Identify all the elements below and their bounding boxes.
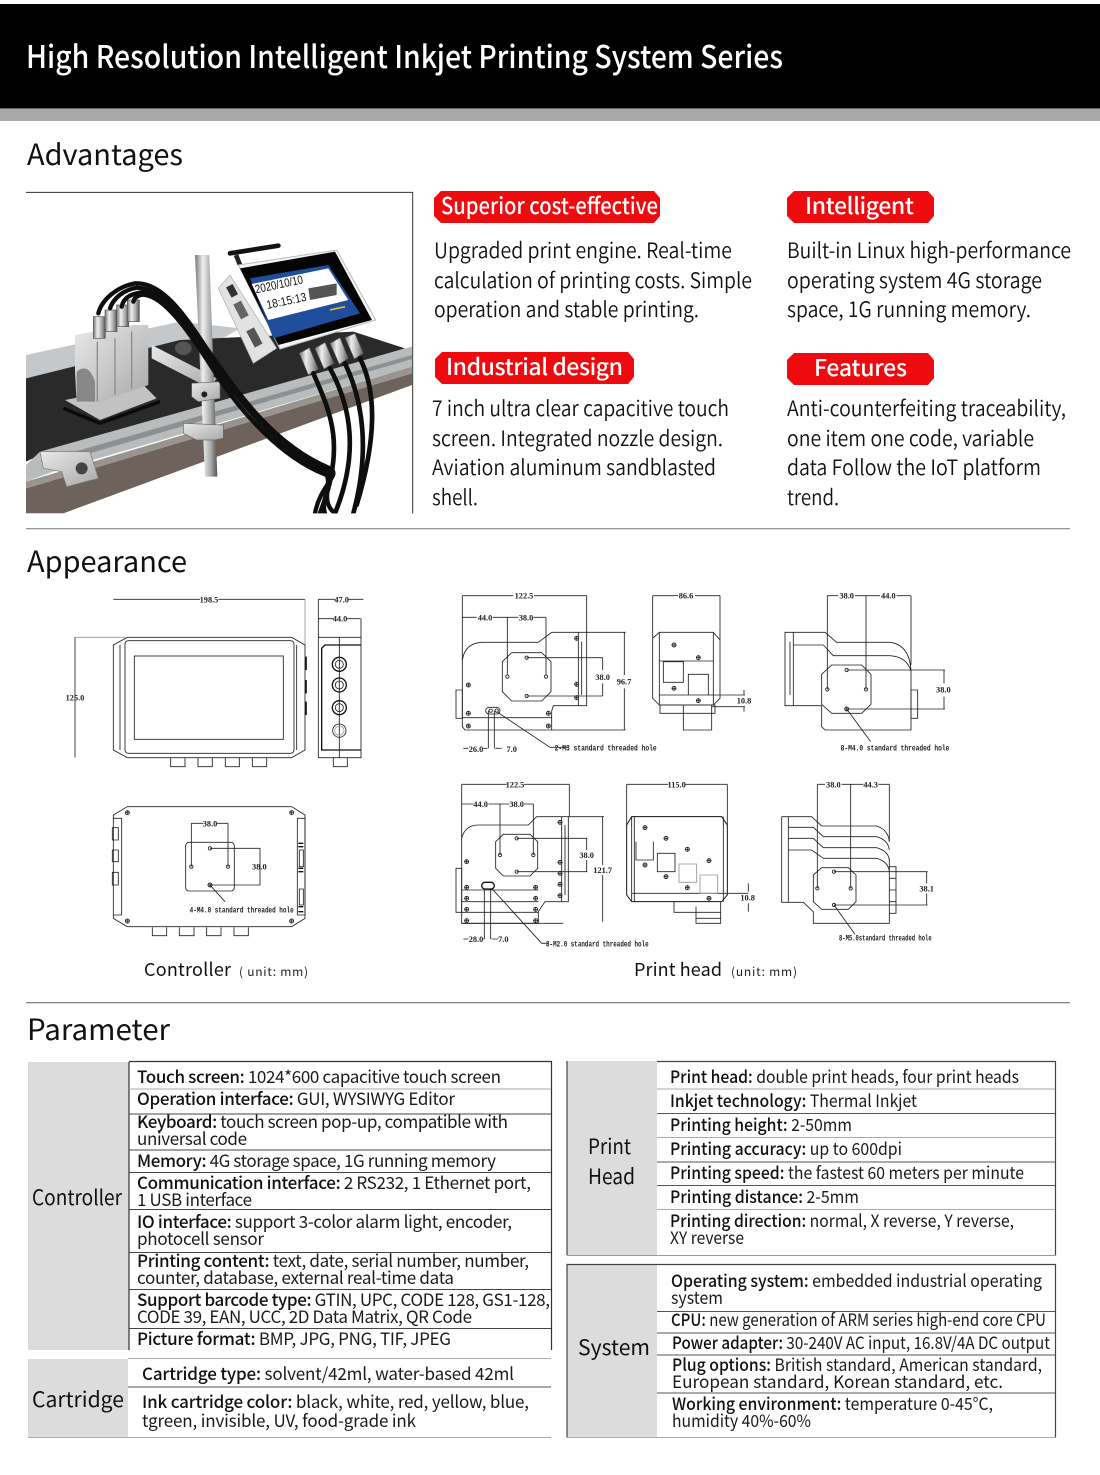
quad head front view: [627, 780, 755, 923]
print head rows: Printing direction: normal, X reverse, Y reverse,: [670, 1207, 1014, 1232]
quad head left view: 38.0: [579, 851, 594, 860]
controller rows: Communication interface: 2 RS232, 1 Ethernet port,: [137, 1169, 531, 1194]
double head left view: [456, 592, 657, 754]
controller front view: 198.5: [200, 595, 218, 604]
title: High Resolution Intelligent Inkjet Printing System Series: [26, 32, 783, 77]
text: intelligent description: operating system 4G storage: [787, 264, 1042, 295]
diagram: double print head drawings: [456, 592, 951, 754]
double head left view: 26.0: [469, 745, 483, 754]
print head rows: Printing height: 2-50mm: [670, 1111, 852, 1136]
text: industrial design description: Aviation aluminum sandblasted: [432, 451, 716, 482]
controller rows: photocell sensor: [137, 1225, 264, 1250]
badge: Industrial design: Industrial design: [446, 348, 623, 382]
controller side view: 44.0: [333, 615, 347, 624]
label: Cartridge: Cartridge: [32, 1384, 124, 1414]
print head rows: Printing speed: the fastest 60 meters per minute: [670, 1159, 1024, 1184]
head base: [65, 385, 157, 420]
text: intelligent description: Built-in Linux high-performance: [787, 234, 1071, 265]
quad head left view: 44.0: [473, 800, 488, 809]
controller rows: Support barcode type: GTIN, UPC, CODE 128, GS1-128,: [137, 1286, 550, 1311]
text: features description: data Follow the IoT platform: [787, 451, 1041, 482]
quad head right view: 8-M5.0standard threaded hole: [839, 935, 932, 944]
text: industrial design description: [432, 392, 729, 512]
controller rows: counter, database, external real-time data: [137, 1264, 454, 1289]
caption: controller: [144, 956, 308, 982]
screen print preview: [255, 276, 306, 309]
controller rows: 1 USB interface: [137, 1186, 252, 1211]
heading: Advantages: Advantages: [27, 132, 183, 174]
controller rows: IO interface: support 3-color alarm light, encoder,: [137, 1208, 512, 1233]
text: cost-effective description: Upgraded print engine. Real-time: [434, 234, 732, 265]
double head left view: 7.0: [506, 745, 517, 754]
double head left view: 44.0: [478, 613, 492, 622]
double head right view: [785, 592, 951, 753]
label: Controller: Controller: [32, 1182, 123, 1212]
back rail: [26, 322, 240, 378]
system rows: CPU: new generation of ARM series high-end core CPU: [671, 1306, 1046, 1331]
table: cartridge parameters: [28, 1358, 551, 1438]
text: features description: trend.: [787, 481, 839, 512]
text: industrial design description: 7 inch ultra clear capacitive touch: [432, 392, 729, 423]
controller rows: [137, 1063, 550, 1350]
badge: Intelligent: Intelligent: [805, 187, 914, 221]
head connectors: [93, 300, 139, 338]
controller back view: 38.0: [203, 819, 217, 828]
front rail: [26, 347, 412, 482]
label: Print Head: Print: [588, 1131, 631, 1161]
controller rows: CODE 39, EAN, UCC, 2D Data Matrix, QR Code: [137, 1303, 472, 1328]
label: Print Head: Head: [588, 1161, 635, 1191]
double head left view: 122.5: [515, 592, 533, 601]
quad head left view: 122.5: [506, 780, 524, 789]
controller back view: 38.0: [252, 863, 267, 872]
double head right view: 8-M4.0 standard threaded hole: [841, 744, 949, 753]
quad head front view: 115.0: [668, 780, 686, 789]
clamps: [192, 382, 220, 402]
text: features description: one item one code, variable: [787, 422, 1034, 453]
vertical pole: [195, 255, 217, 477]
controller rows: universal code: [137, 1125, 247, 1150]
caption: print head: Print head: [634, 956, 722, 982]
cables from controller: [313, 358, 372, 513]
quad head left view: 8-M2.0 standard threaded hole: [546, 940, 649, 949]
controller rows: Picture format: BMP, JPG, PNG, TIF, JPEG: [137, 1325, 451, 1350]
label: System: System: [578, 1332, 650, 1362]
bottom bracket: [40, 452, 98, 487]
screen print preview: 18:15:13: [265, 290, 308, 312]
badge: Superior cost-effective: Superior cost-effective: [441, 187, 658, 221]
caption: print head: [634, 956, 797, 982]
diagram: controller drawings: [66, 595, 363, 936]
system rows: Power adapter: 30-240V AC input, 16.8V/4A DC output: [672, 1329, 1051, 1354]
double head left view: 96.7: [617, 677, 631, 686]
brown frame: [26, 373, 412, 513]
header banner: [0, 4, 1100, 121]
system rows: Operating system: embedded industrial operating: [671, 1267, 1042, 1292]
caption: controller: ( unit: mm): [239, 963, 308, 980]
double head front view: 86.6: [679, 592, 693, 601]
controller casing: [238, 250, 376, 349]
belt: [26, 332, 405, 462]
controller side view: [318, 595, 363, 767]
table: controller parameters: [28, 1062, 552, 1350]
heading: Parameter: Parameter: [27, 1007, 171, 1049]
controller back view: 4-M4.0 standard threaded hole: [190, 907, 294, 916]
controller rows: Printing content: text, date, serial number, number,: [137, 1247, 529, 1272]
system rows: [671, 1267, 1051, 1432]
controller back view: [112, 807, 305, 936]
double head front view: [653, 592, 751, 730]
system rows: European standard, Korean standard, etc.: [672, 1368, 1003, 1393]
text: intelligent description: space, 1G running memory.: [787, 293, 1031, 324]
horizontal rod: [152, 345, 216, 382]
text: features description: [787, 392, 1066, 512]
caption: controller: Controller: [144, 956, 232, 982]
text: cost-effective description: [434, 234, 752, 324]
cables from head: [98, 283, 335, 513]
cartridge rows: [142, 1360, 529, 1432]
controller connectors: [299, 333, 363, 375]
label: Print Head: [588, 1131, 635, 1191]
system rows: system: [671, 1284, 723, 1309]
system rows: Plug options: British standard, American standard,: [672, 1351, 1042, 1376]
text: cost-effective description: calculation of printing costs. Simple: [434, 264, 752, 295]
controller rows: Touch screen: 1024*600 capacitive touch screen: [137, 1063, 501, 1088]
table: print head parameters: [567, 1061, 1056, 1256]
quad head right view: 44.3: [863, 780, 878, 789]
quad head right view: [782, 780, 934, 944]
quad head left view: 28.0: [469, 935, 483, 944]
double head right view: 38.0: [936, 686, 951, 695]
double head left view: 2-M3 standard threaded hole: [555, 744, 657, 753]
caption: print head: (unit: mm): [731, 963, 797, 980]
controller rows: Keyboard: touch screen pop-up, compatible with: [137, 1108, 508, 1133]
heading: Appearance: Appearance: [27, 539, 187, 581]
quad head left view: [456, 780, 649, 949]
double head left view: 38.0: [595, 673, 610, 682]
print head rows: Inkjet technology: Thermal Inkjet: [670, 1087, 918, 1112]
double head front view: 10.8: [737, 697, 751, 706]
system rows: humidity 40%-60%: [672, 1407, 811, 1432]
system rows: Working environment: temperature 0-45°C,: [672, 1390, 993, 1415]
table: system parameters: [567, 1264, 1056, 1438]
controller side: [218, 275, 277, 363]
product photo: inkjet printer on conveyor: [26, 192, 413, 513]
badge: Features: [787, 349, 934, 385]
screen print preview: 2020/10/10: [254, 272, 304, 296]
badge: Features: Features: [814, 349, 907, 383]
double head left view: 38.0: [519, 613, 533, 622]
print head rows: [670, 1063, 1024, 1249]
controller rows: Operation interface: GUI, WYSIWYG Editor: [137, 1085, 455, 1110]
double head right view: 38.0: [839, 592, 854, 601]
quad head right view: 38.0: [826, 780, 841, 789]
quad head left view: 7.0: [498, 935, 509, 944]
print head rows: Print head: double print heads, four print heads: [670, 1063, 1019, 1088]
text: cost-effective description: operation and stable printing.: [434, 293, 699, 324]
text: industrial design description: shell.: [432, 481, 478, 512]
text: industrial design description: screen. Integrated nozzle design.: [432, 422, 723, 453]
quad head left view: 121.7: [593, 866, 612, 875]
print head rows: XY reverse: [670, 1224, 744, 1249]
print head rows: Printing accuracy: up to 600dpi: [670, 1135, 902, 1160]
text: intelligent description: [787, 234, 1071, 324]
print head rows: Printing distance: 2-5mm: [670, 1183, 859, 1208]
quad head front view: 10.8: [740, 894, 755, 903]
cartridge rows: Ink cartridge color: black, white, red, yellow, blue,: [142, 1388, 529, 1413]
controller front view: 125.0: [66, 693, 84, 702]
head block: [75, 325, 148, 403]
quad head left view: 38.0: [509, 800, 524, 809]
cartridge rows: Cartridge type: solvent/42ml, water-based 42ml: [142, 1360, 514, 1385]
double head right view: 44.0: [881, 592, 896, 601]
diagram: quad print head drawings: [456, 780, 934, 949]
controller front view: [66, 595, 306, 767]
controller side view: 47.0: [334, 595, 349, 604]
cartridge rows: tgreen, invisible, UV, food-grade ink: [142, 1407, 417, 1432]
antenna: [230, 246, 278, 253]
controller rows: Memory: 4G storage space, 1G running memory: [137, 1147, 496, 1172]
text: features description: Anti-counterfeiting traceability,: [787, 392, 1066, 423]
quad head right view: 38.1: [919, 884, 934, 893]
